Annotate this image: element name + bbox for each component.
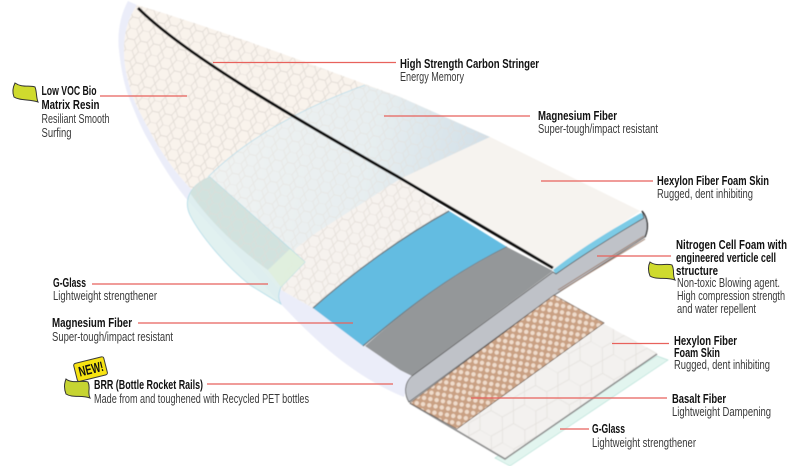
label: low VOC resin <box>42 84 110 140</box>
lower g-glass sheet <box>495 356 668 466</box>
new badge: NEW! <box>77 358 105 380</box>
label: low VOC resin: Resiliant Smooth <box>42 112 110 126</box>
label: low VOC resin: Low VOC Bio <box>42 84 97 98</box>
label: hexylon foam skin bottom: Foam Skin <box>674 346 720 360</box>
magnesium fiber deck panel <box>208 85 490 261</box>
label: g-glass bottom <box>592 422 696 450</box>
label: low VOC resin: Matrix Resin <box>42 98 100 112</box>
label: magnesium fiber top <box>538 109 658 136</box>
board rail <box>118 1 412 397</box>
label: carbon stringer <box>400 57 539 84</box>
label: basalt fiber <box>672 392 771 419</box>
label: g-glass left: G-Glass <box>53 276 86 290</box>
icon: leaf, nitrogen foam <box>648 262 675 280</box>
label: magnesium fiber left: Super-tough/impact resistant <box>52 330 173 344</box>
leader lines <box>92 62 671 429</box>
icon: leaf, BRR rails <box>64 379 90 398</box>
label: hexylon foam skin bottom: Rugged, dent inhibiting <box>674 358 770 372</box>
label: bottle rocket rails <box>94 378 309 406</box>
lower hexylon sheet <box>410 324 657 459</box>
label: hexylon foam skin top: Rugged, dent inhibiting <box>657 187 753 201</box>
foam underside edge lines <box>558 236 645 291</box>
label: magnesium fiber top: Super-tough/impact resistant <box>538 122 658 136</box>
label: basalt fiber: Basalt Fiber <box>672 392 726 406</box>
label: g-glass bottom: G-Glass <box>592 422 625 436</box>
grey foam core deck <box>365 247 553 376</box>
label: basalt fiber: Lightweight Dampening <box>672 405 771 419</box>
label: low VOC resin: Surfing <box>42 126 72 140</box>
label: hexylon foam skin top <box>657 174 769 201</box>
hexylon fiber skin upper <box>400 137 640 270</box>
blue edge strip <box>553 213 647 274</box>
label: g-glass left: Lightweight strengthener <box>53 289 157 303</box>
label: bottle rocket rails: Made from and toughened with Recycled PET bottles <box>94 392 309 406</box>
icon: leaf, low VOC resin <box>13 83 38 102</box>
nose deck resin <box>124 5 640 308</box>
hexylon fiber skin lower <box>278 179 449 308</box>
label: bottle rocket rails: BRR (Bottle Rocket Rails) <box>94 378 203 392</box>
label: hexylon foam skin bottom <box>674 334 770 372</box>
nitrogen cell foam band <box>406 211 647 402</box>
label: carbon stringer: High Strength Carbon Stringer <box>400 57 539 71</box>
blue layer edge lines <box>313 211 507 346</box>
carbon stringer <box>138 8 553 268</box>
new badge <box>73 356 108 382</box>
label: nitrogen cell foam: structure <box>676 264 718 278</box>
surfboard cutaway illustration <box>118 1 668 466</box>
label: magnesium fiber left: Magnesium Fiber <box>52 316 132 330</box>
upper g-glass sheet <box>187 177 305 304</box>
label: g-glass bottom: Lightweight strengthener <box>592 436 696 450</box>
label: magnesium fiber top: Magnesium Fiber <box>538 109 617 123</box>
label: nitrogen cell foam <box>676 238 787 316</box>
label: magnesium fiber left <box>52 316 173 344</box>
magnesium fiber blue layer <box>313 211 507 346</box>
label: carbon stringer: Energy Memory <box>400 70 465 84</box>
label: hexylon foam skin bottom: Hexylon Fiber <box>674 334 737 348</box>
label: g-glass left <box>53 276 157 303</box>
label: nitrogen cell foam: and water repellent <box>677 302 756 316</box>
basalt fiber sheet <box>410 295 604 429</box>
